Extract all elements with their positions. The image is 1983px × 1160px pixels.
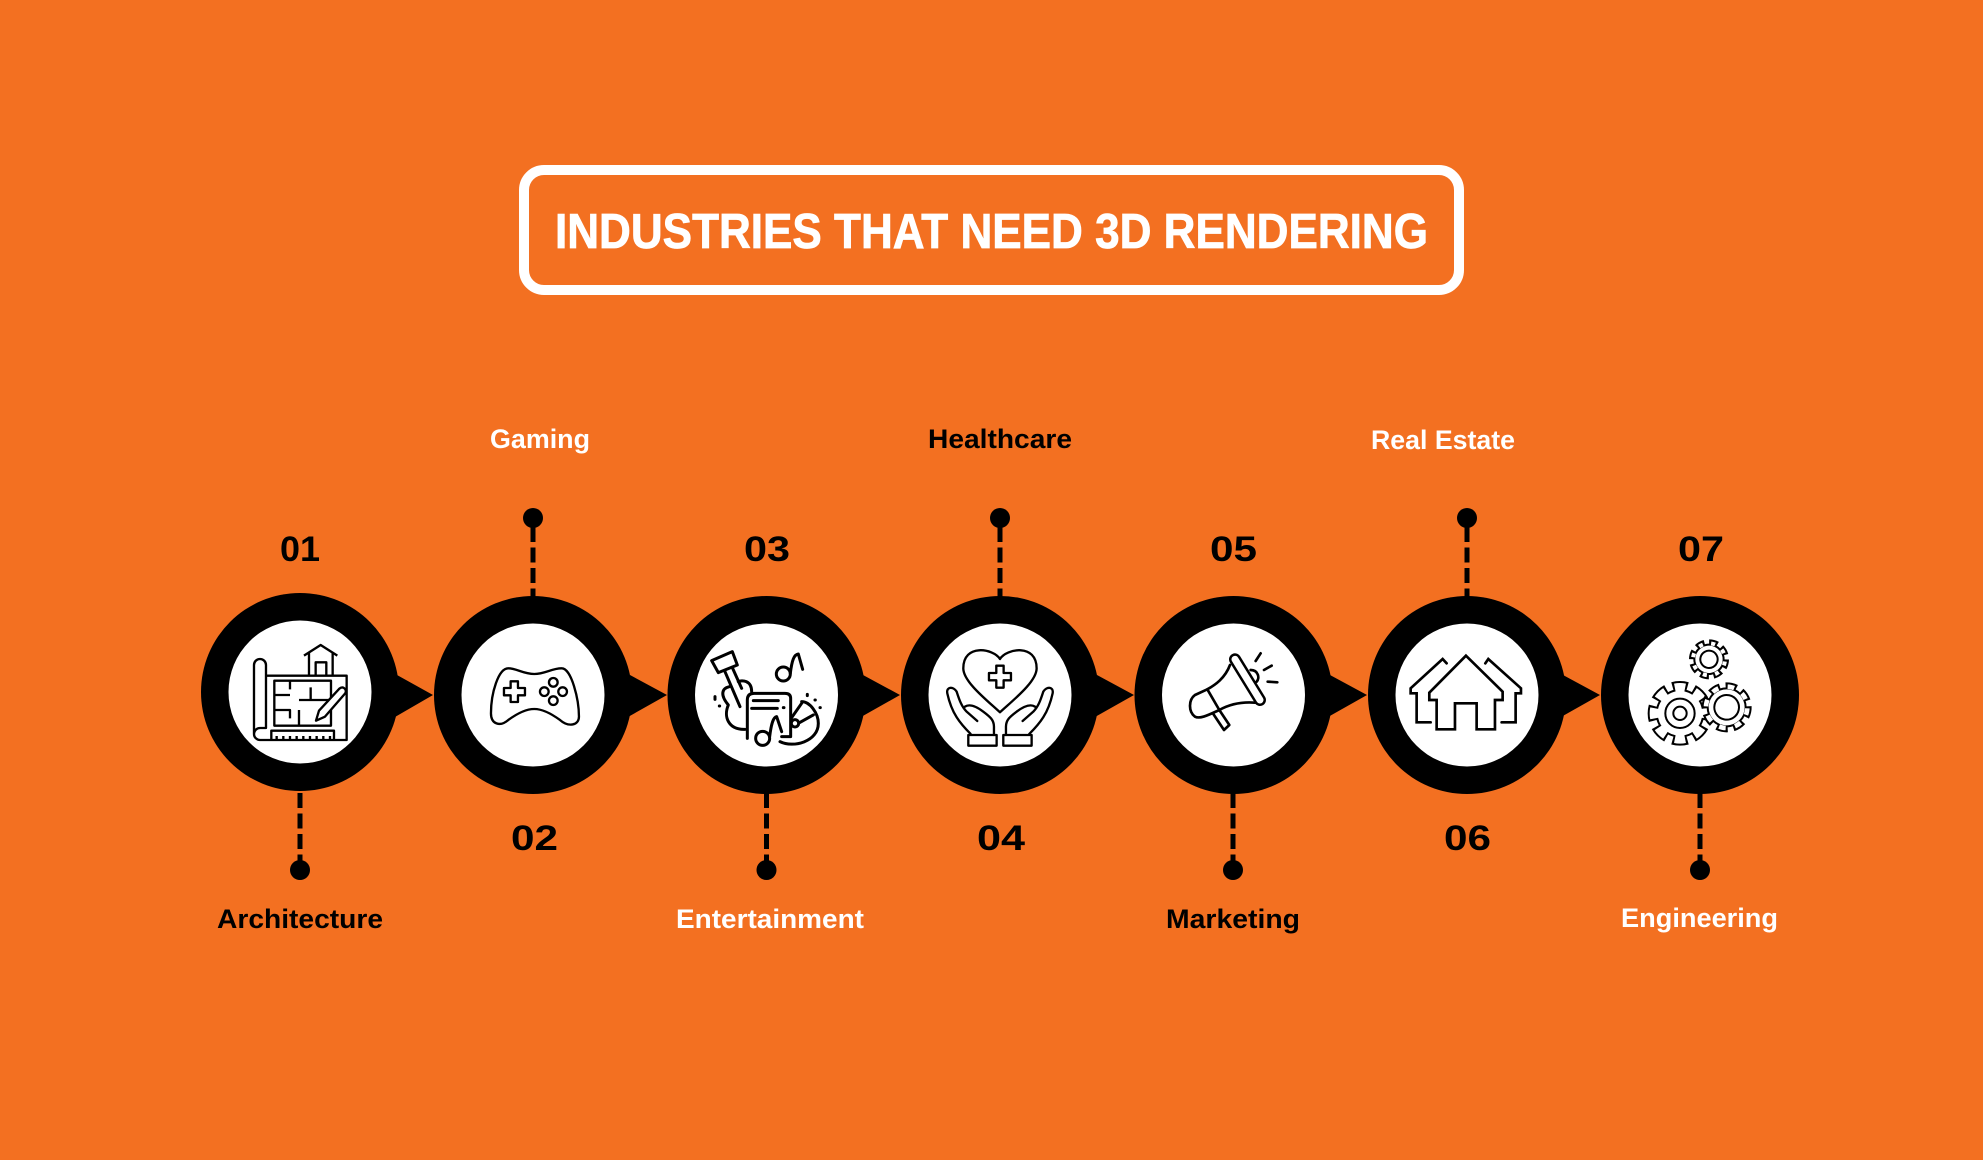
- step 6 badge: [1368, 596, 1600, 794]
- step numbers: 02: [511, 819, 558, 858]
- label: Architecture: Architecture: [217, 904, 383, 934]
- step 7 badge: [1601, 596, 1799, 794]
- label: Marketing: Marketing: [1166, 904, 1300, 934]
- step numbers: 05: [1210, 530, 1257, 569]
- title: INDUSTRIES THAT NEED 3D RENDERING: [555, 205, 1428, 259]
- label: Gaming: Gaming: [490, 424, 590, 454]
- step numbers: [280, 530, 1724, 858]
- step 2 badge: [434, 596, 667, 794]
- label: Healthcare: Healthcare: [928, 424, 1072, 454]
- label: Entertainment: Entertainment: [676, 904, 864, 934]
- icon: gears: [1654, 640, 1751, 739]
- step 3 badge: [668, 596, 900, 794]
- icon: healthcare hands and heart: [947, 650, 1053, 746]
- title box: [524, 170, 1459, 290]
- connectors: dashed stems: [300, 527, 1700, 870]
- label: Real Estate: Real Estate: [1371, 425, 1515, 455]
- icon: megaphone: [1190, 653, 1277, 730]
- step 4 badge: [901, 596, 1134, 794]
- icon: game controller: [491, 668, 579, 725]
- step numbers: 04: [977, 819, 1026, 858]
- icon: houses: [1411, 656, 1521, 729]
- step numbers: 06: [1444, 819, 1491, 858]
- icon: entertainment: [712, 652, 820, 745]
- label: Engineering: Engineering: [1621, 903, 1778, 933]
- step numbers: 07: [1678, 530, 1724, 569]
- connector dots: [290, 508, 1710, 880]
- step 1 badge: [201, 593, 433, 791]
- step numbers: 01: [280, 530, 320, 569]
- icon: blueprint: [254, 645, 347, 740]
- step 5 badge: [1134, 596, 1367, 794]
- step numbers: 03: [744, 530, 790, 569]
